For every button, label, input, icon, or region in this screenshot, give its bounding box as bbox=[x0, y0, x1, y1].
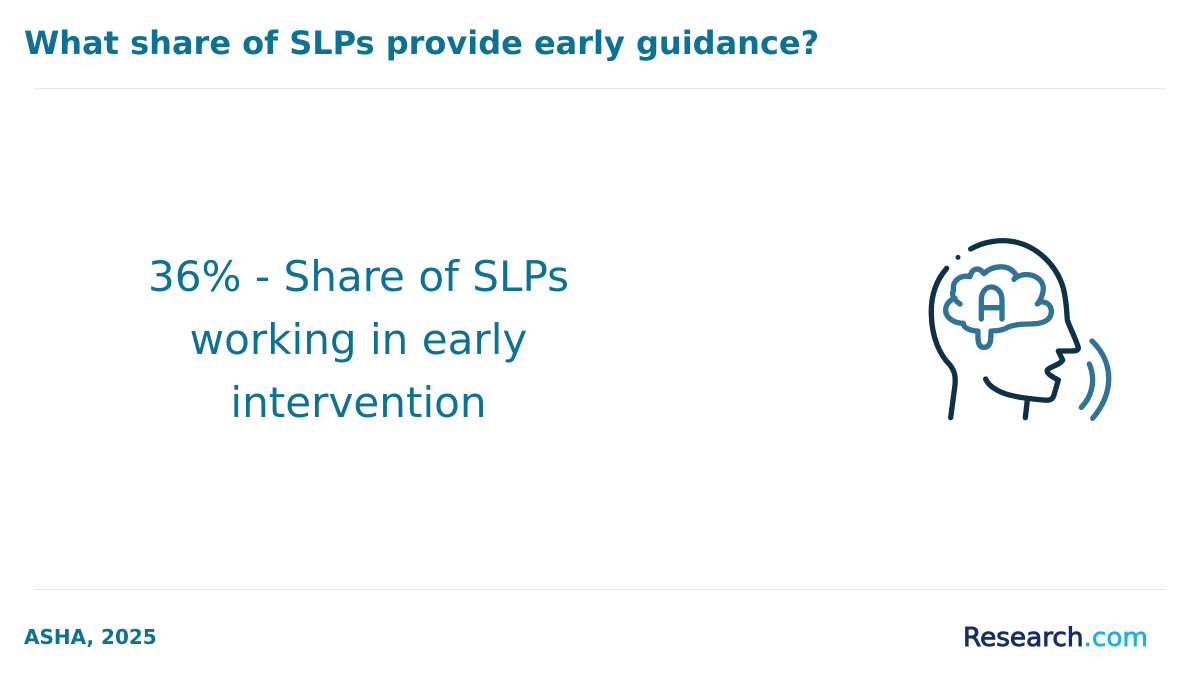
title: What share of SLPs provide early guidance? bbox=[24, 24, 819, 62]
statistic text: working in early bbox=[190, 315, 527, 364]
icon: brain with letter A bbox=[946, 267, 1051, 347]
icon: speech waves bbox=[1081, 341, 1109, 418]
logo: Research.com: Research.com bbox=[963, 623, 1148, 653]
icon: head with brain and speech waves bbox=[928, 238, 1112, 421]
statistic text: 36% - Share of SLPs bbox=[148, 252, 569, 301]
icon: head outline bbox=[931, 241, 1078, 418]
statistic text bbox=[148, 252, 569, 427]
source: ASHA, 2025 bbox=[24, 625, 157, 649]
statistic text: intervention bbox=[230, 378, 487, 427]
